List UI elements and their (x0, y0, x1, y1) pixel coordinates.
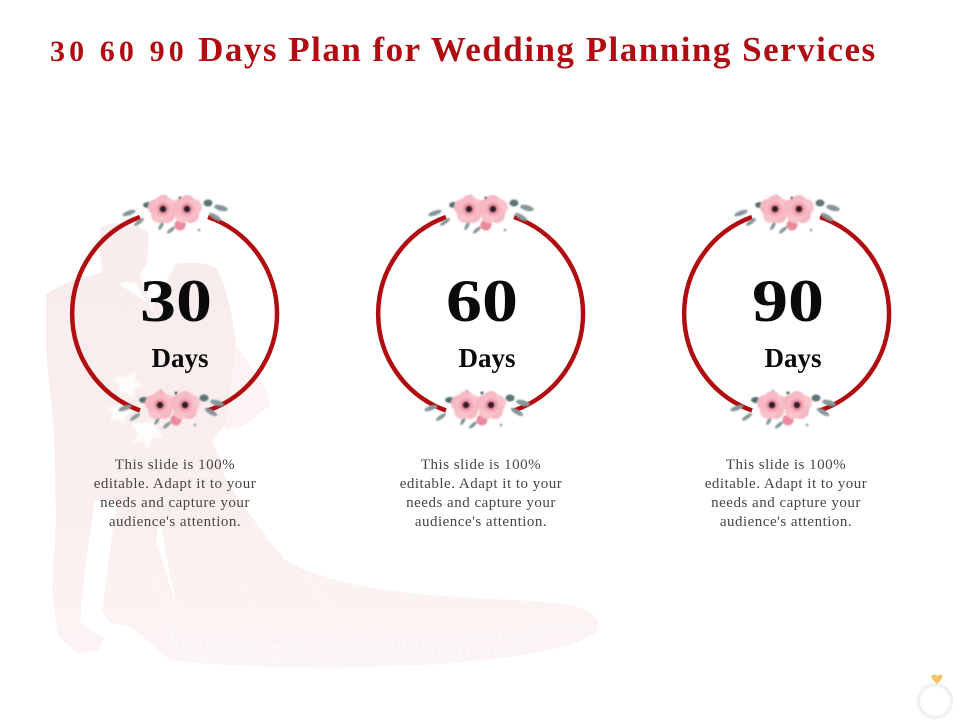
text: 90 days description (705, 457, 867, 530)
text: 60 days description: This slide is 100% (421, 457, 541, 473)
title: 30 60 90 Days Plan for Wedding Planning Services (50, 30, 877, 69)
text: 90 days description: This slide is 100% (726, 457, 846, 473)
text: 60 days description: editable. Adapt it to your (400, 476, 562, 492)
label: days 30: Days (151, 343, 208, 373)
wreath: 90 days (684, 194, 889, 430)
text: 90 days description: editable. Adapt it to your (705, 476, 867, 492)
text: 90 days description: needs and capture your (711, 495, 861, 511)
number: 60: 60 (446, 268, 518, 334)
label: days 90: Days (764, 343, 822, 373)
white bouquet blossoms (104, 371, 164, 450)
text: 30 days description: This slide is 100% (115, 457, 235, 473)
number: 90: 90 (752, 268, 824, 334)
wreath: 60 days (378, 194, 583, 430)
number: 30: 30 (140, 268, 212, 334)
text: 30 days description: needs and capture your (100, 495, 250, 511)
text: 90 days description: audience's attention. (720, 514, 852, 530)
veil (225, 345, 270, 430)
text: 60 days description: needs and capture your (406, 495, 556, 511)
label: days 60: Days (458, 343, 516, 373)
text: 60 days description: audience's attention. (415, 514, 547, 530)
text: 30 days description (94, 457, 256, 530)
wreath: 30 days (72, 194, 277, 430)
text: 30 days description: audience's attention. (109, 514, 241, 530)
text: 60 days description (400, 457, 562, 530)
text: 30 days description: editable. Adapt it to your (94, 476, 256, 492)
